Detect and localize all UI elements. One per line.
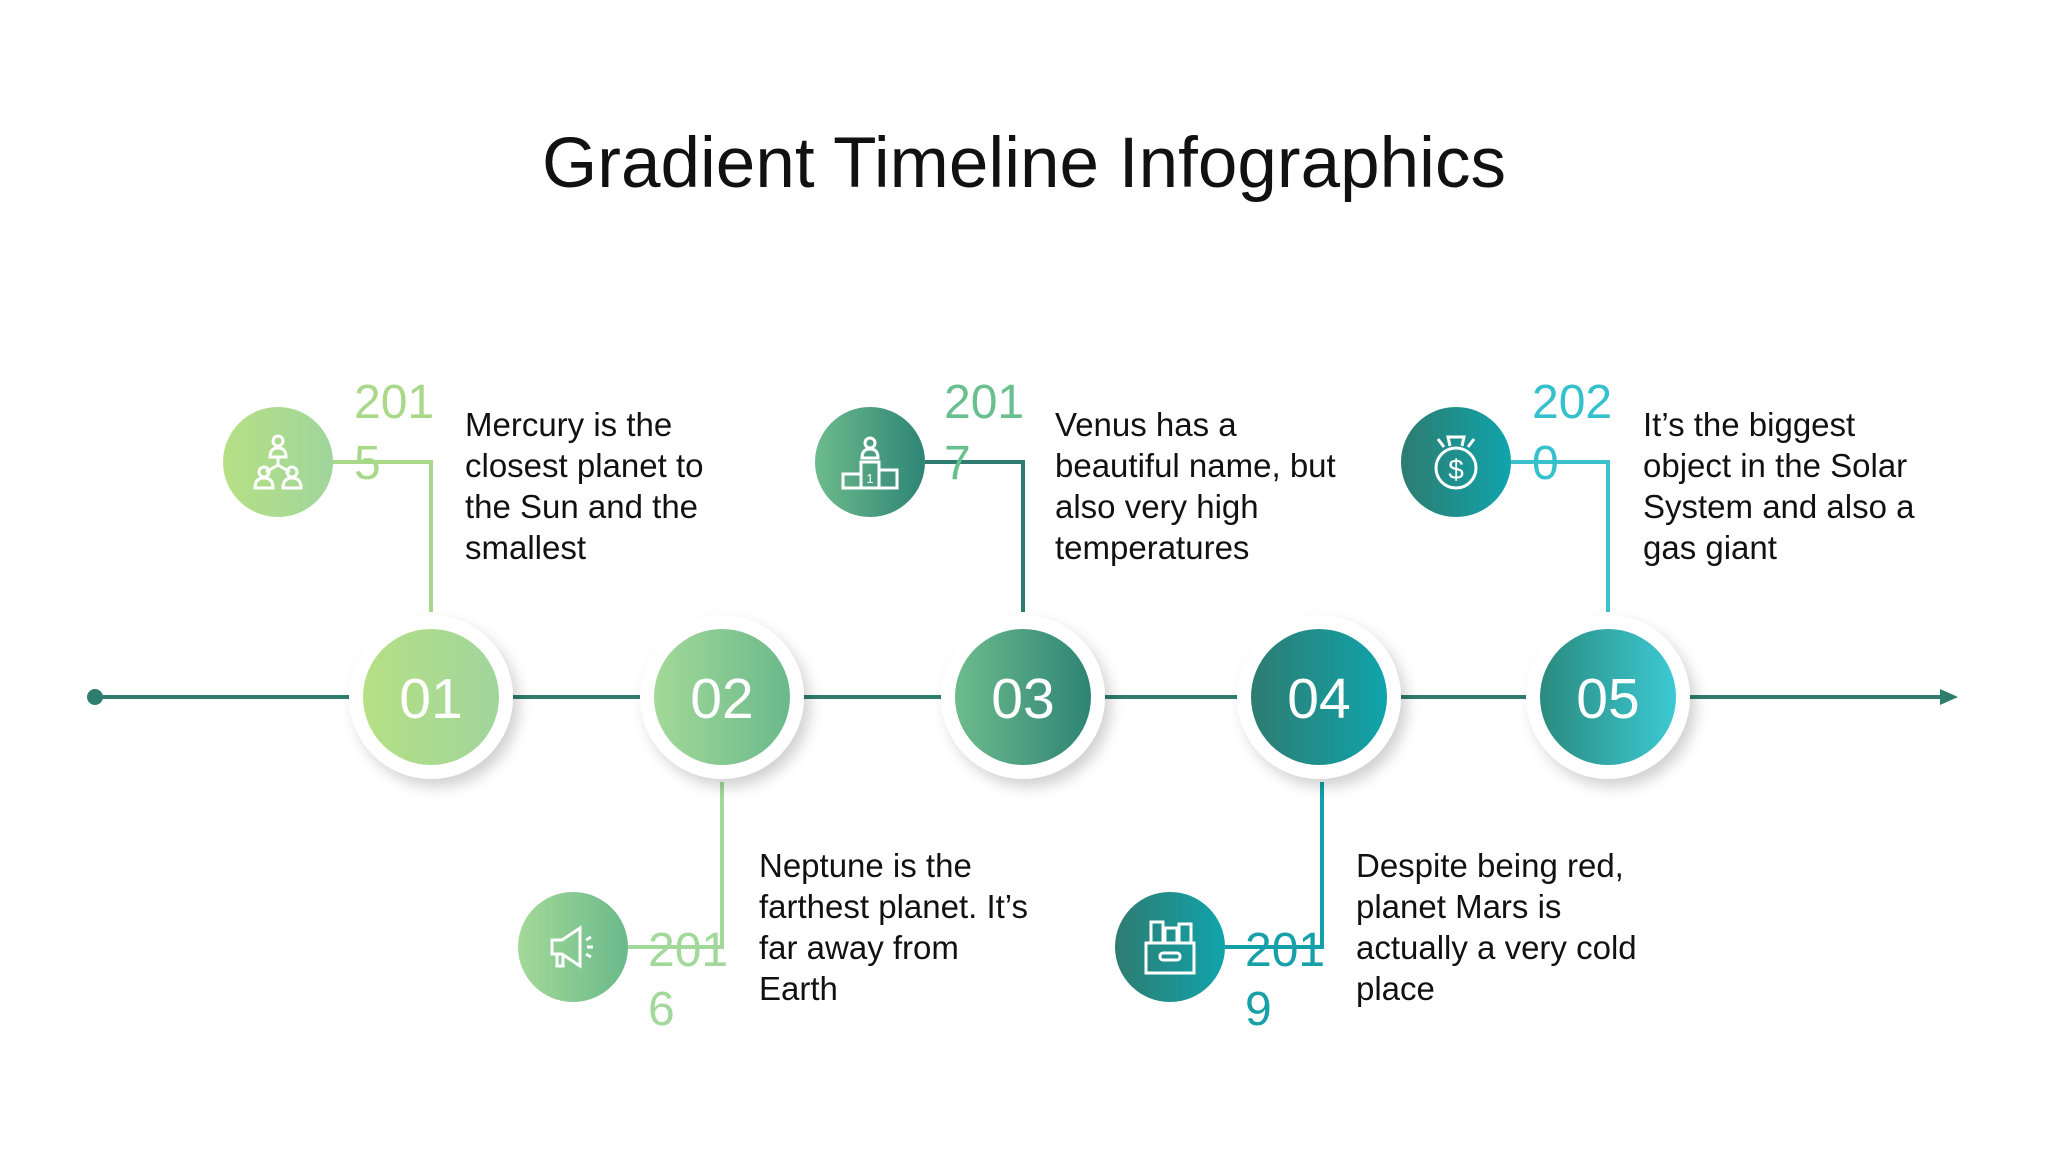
- text: Mars: actually a very cold: [1356, 929, 1637, 966]
- text: Venus: beautiful name, but: [1055, 447, 1336, 484]
- text: Neptune: Neptune is the: [759, 847, 972, 884]
- icon: money bag: $: [1448, 454, 1464, 485]
- step 04 circle: [1237, 615, 1401, 779]
- year 2019: 201: [1245, 924, 1325, 977]
- step 03 circle: 03: [991, 667, 1055, 731]
- text: Venus: temperatures: [1055, 529, 1249, 566]
- text: Venus: Venus has a: [1055, 406, 1237, 443]
- year 2019: 9: [1245, 983, 1272, 1036]
- step 03 circle: [941, 615, 1105, 779]
- text: Mercury: the Sun and the: [465, 488, 698, 525]
- step 02 circle: 02: [690, 667, 754, 731]
- step 01 circle: 01: [399, 667, 463, 731]
- year 2015: 201: [354, 376, 434, 429]
- year 2020: 202: [1532, 376, 1612, 429]
- year 2017: 7: [944, 437, 971, 490]
- title: Gradient Timeline Infographics: [542, 124, 1506, 203]
- text: Mercury: smallest: [465, 529, 586, 566]
- connector 02: [628, 782, 722, 947]
- step 05 circle: 05: [1576, 667, 1640, 731]
- year 2016: 201: [648, 924, 728, 977]
- icon: people hierarchy: [223, 407, 333, 517]
- step 05 circle: [1526, 615, 1690, 779]
- text: Jupiter: object in the Solar: [1643, 447, 1907, 484]
- icon: money bag: [1401, 407, 1511, 517]
- year 2015: 5: [354, 437, 381, 490]
- icon: box: [1115, 892, 1225, 1002]
- step 01 circle: [349, 615, 513, 779]
- text: Neptune: farthest planet. It’s: [759, 888, 1028, 925]
- text: Mercury: Mercury is the: [465, 406, 672, 443]
- year 2017: 201: [944, 376, 1024, 429]
- connector 01: [333, 462, 431, 612]
- text: Jupiter: It’s the biggest: [1643, 406, 1855, 443]
- text: Mars: place: [1356, 970, 1435, 1007]
- connector 05: [1511, 462, 1608, 612]
- text: Jupiter: gas giant: [1643, 529, 1777, 566]
- connector 04: [1225, 782, 1322, 947]
- icon: podium: 1: [866, 471, 874, 486]
- text: Jupiter: System and also a: [1643, 488, 1915, 525]
- text: Venus: also very high: [1055, 488, 1259, 525]
- year 2020: 0: [1532, 437, 1559, 490]
- text: Neptune: Earth: [759, 970, 838, 1007]
- year 2016: 6: [648, 983, 675, 1036]
- timeline axis: [87, 689, 1958, 705]
- text: Neptune: far away from: [759, 929, 959, 966]
- text: Mercury: closest planet to: [465, 447, 703, 484]
- text: Mars: Despite being red,: [1356, 847, 1624, 884]
- connector 03: [925, 462, 1023, 612]
- icon: podium: [815, 407, 925, 517]
- icon: megaphone: [518, 892, 628, 1002]
- step 02 circle: [640, 615, 804, 779]
- step 04 circle: 04: [1287, 667, 1351, 731]
- text: Mars: planet Mars is: [1356, 888, 1561, 925]
